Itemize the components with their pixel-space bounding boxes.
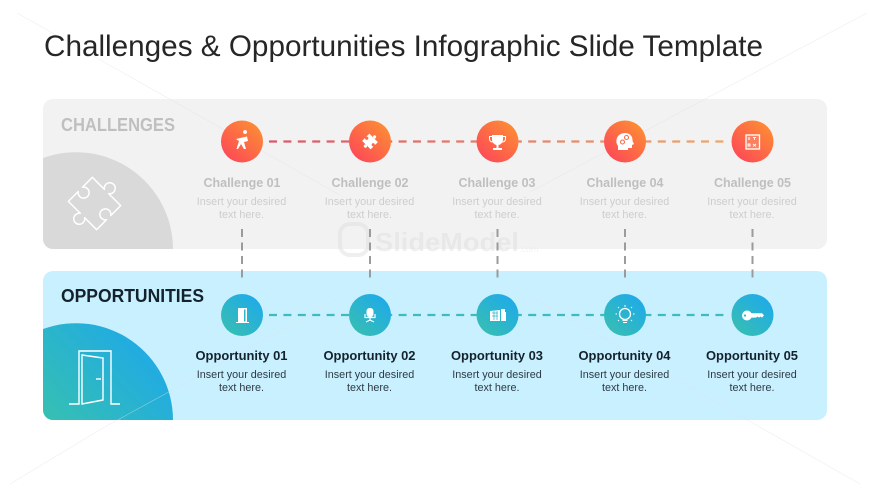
challenge 02	[325, 120, 414, 221]
icon: head with gears	[604, 120, 646, 162]
description: Insert your desired	[452, 369, 542, 381]
challenge connector dashes	[269, 140, 728, 143]
description: Insert your desired	[707, 369, 797, 381]
description: Insert your desired	[707, 196, 797, 208]
challenge 03	[452, 120, 542, 221]
opportunity 02	[324, 294, 416, 394]
watermark: SlideModel	[375, 227, 519, 257]
opportunity 04	[578, 294, 671, 394]
opportunity connector dashes	[269, 314, 728, 316]
heading: opportunities: OPPORTUNITIES	[61, 286, 204, 306]
description: text here.	[729, 209, 775, 221]
heading: challenges: CHALLENGES	[61, 115, 175, 135]
label: Opportunity 01	[196, 348, 288, 363]
description: Insert your desired	[325, 196, 414, 208]
label: Challenge 01	[204, 175, 280, 190]
description: text here.	[219, 382, 264, 394]
description: text here.	[474, 209, 520, 221]
description: text here.	[602, 209, 647, 221]
label: Challenge 03	[458, 175, 536, 190]
opportunity 03	[451, 294, 543, 394]
description: Insert your desired	[452, 196, 542, 208]
description: Insert your desired	[197, 369, 286, 381]
description: Insert your desired	[580, 196, 669, 208]
label: Challenge 04	[586, 175, 664, 190]
label: Opportunity 05	[706, 348, 798, 363]
icon: buildings	[476, 294, 518, 336]
icon: large open door	[69, 351, 120, 404]
icon: trophy	[476, 120, 518, 162]
watermark	[340, 224, 539, 257]
icon: puzzle	[349, 120, 391, 162]
description: text here.	[347, 209, 392, 221]
panel: challenges	[43, 99, 827, 249]
challenge 04	[580, 120, 669, 221]
icon: door	[221, 294, 263, 336]
description: text here.	[219, 209, 264, 221]
description: text here.	[347, 382, 392, 394]
description: text here.	[602, 382, 647, 394]
panel: opportunities	[43, 271, 827, 420]
title: Challenges & Opportunities Infographic Slide Template	[44, 30, 763, 63]
description: Insert your desired	[580, 369, 669, 381]
label: Opportunity 04	[578, 348, 671, 363]
description: Insert your desired	[197, 196, 286, 208]
label: Opportunity 03	[451, 348, 543, 363]
label: Opportunity 02	[324, 348, 416, 363]
vertical dashed links	[242, 229, 752, 281]
watermark: .com	[519, 244, 539, 254]
opportunity 05	[706, 294, 798, 394]
description: Insert your desired	[325, 369, 414, 381]
icon: large puzzle piece	[61, 170, 128, 237]
icon: light bulb	[604, 294, 646, 336]
challenge 01	[197, 120, 286, 221]
description: text here.	[729, 382, 775, 394]
icon: runner hurdle	[221, 120, 263, 162]
icon: key	[732, 294, 774, 336]
icon: strategy board	[732, 120, 774, 162]
challenge 05	[707, 120, 797, 221]
description: text here.	[474, 382, 520, 394]
icon: office chair	[349, 294, 391, 336]
label: Challenge 05	[714, 175, 791, 190]
label: Challenge 02	[332, 175, 408, 190]
opportunity 01	[196, 294, 288, 394]
